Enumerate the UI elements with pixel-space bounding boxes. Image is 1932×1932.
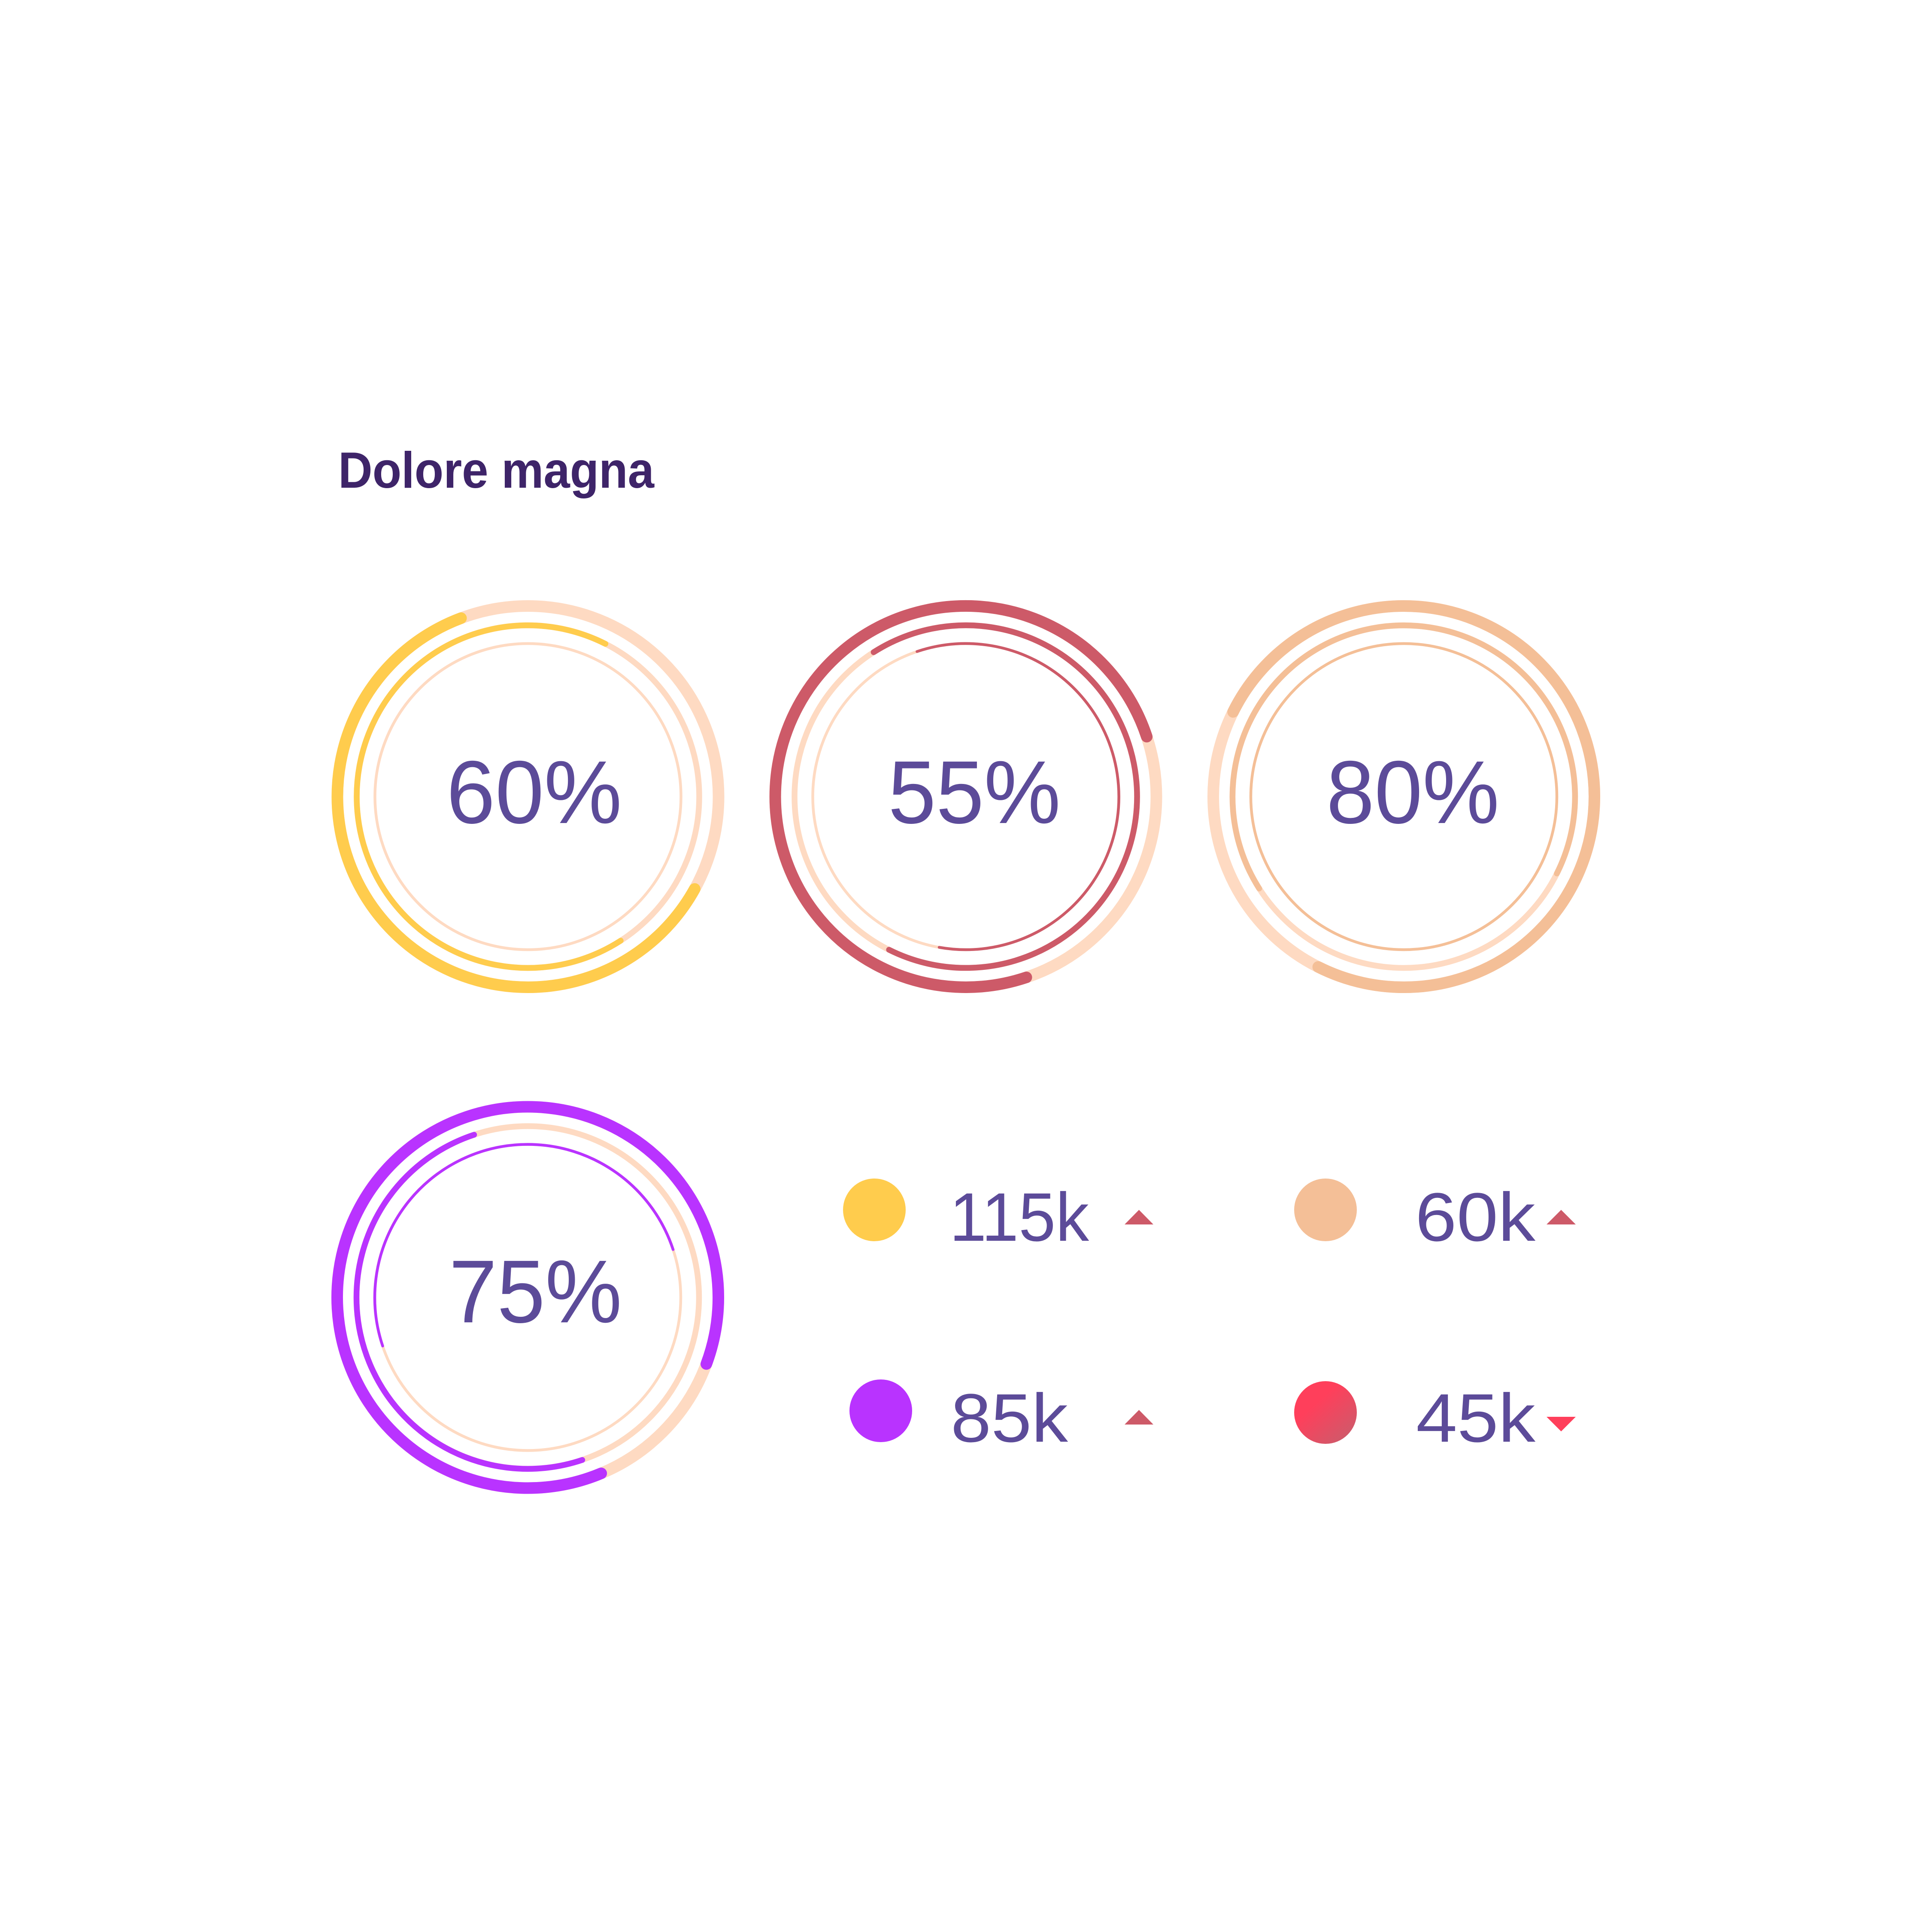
legend item: yellow 115k up: [843, 1179, 1153, 1255]
legend item: red 45k down: 45k: [1416, 1379, 1536, 1456]
legend item: yellow 115k up: 115k: [949, 1179, 1089, 1255]
panel: 60% ring gauge: 60%: [446, 743, 622, 842]
legend item: tan 60k up: 60k: [1415, 1179, 1536, 1255]
panel: 60% ring gauge: [337, 606, 719, 987]
panel: 55% ring gauge: 55%: [888, 743, 1061, 842]
legend item: tan 60k up: [1294, 1179, 1576, 1255]
panel: 75% ring gauge: 75%: [449, 1242, 622, 1342]
panel: 80% ring gauge: [1213, 606, 1595, 987]
title: Dolore magna: [338, 442, 655, 499]
panel: 80% ring gauge: 80%: [1326, 743, 1499, 842]
legend item: purple 85k up: 85k: [951, 1379, 1068, 1456]
panel: 55% ring gauge: [775, 606, 1156, 987]
panel: 75% ring gauge: [337, 1107, 719, 1488]
legend item: purple 85k up: [849, 1379, 1153, 1456]
legend item: red 45k down: [1294, 1379, 1576, 1456]
